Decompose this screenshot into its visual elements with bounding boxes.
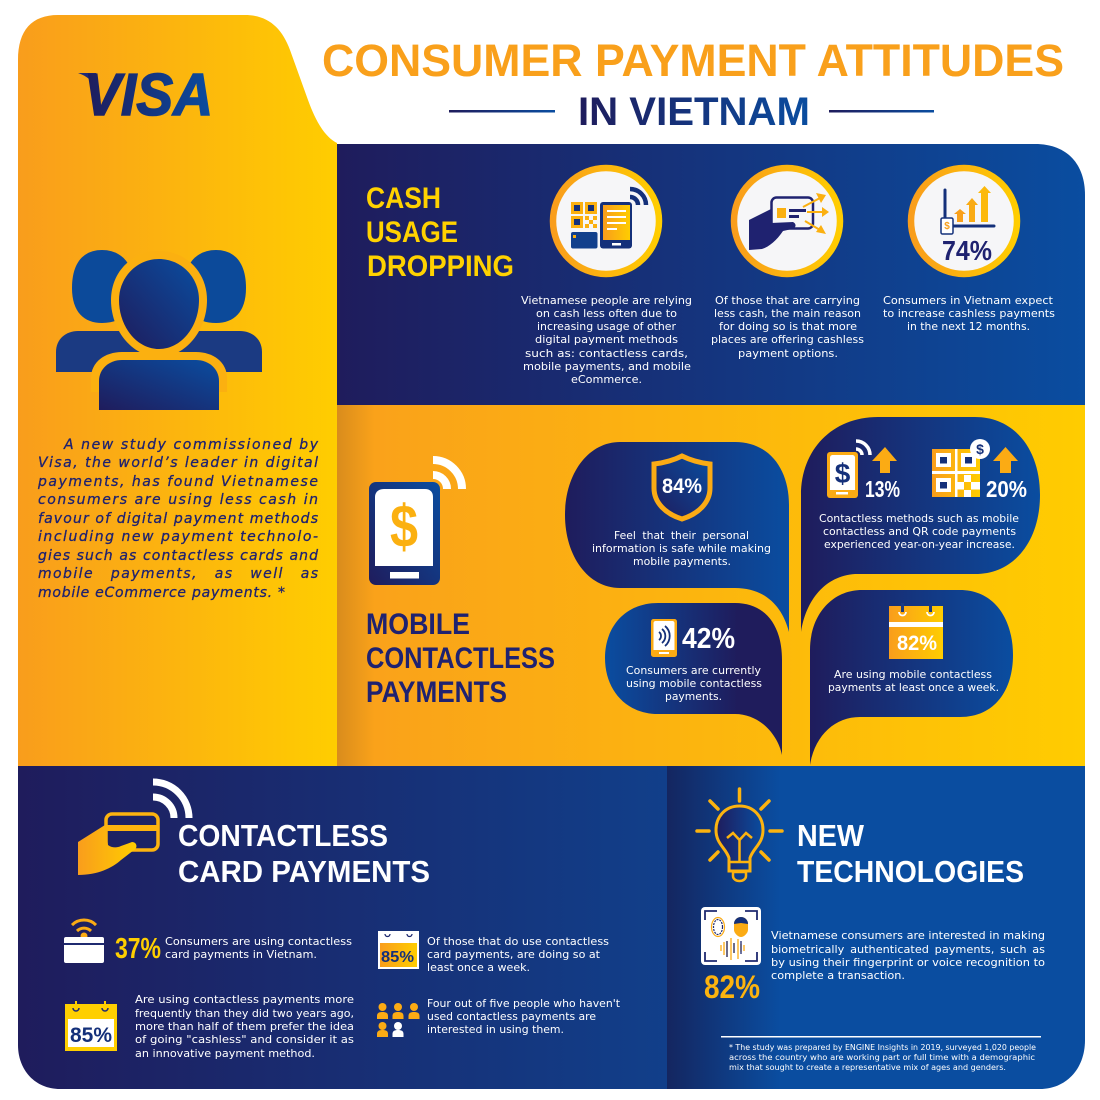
text: intro paragraph: including new payment technolo- [38,529,318,545]
icon: group of people [56,250,262,410]
text: relying on cash less: eCommerce. [571,374,642,386]
stat: 85% weekly: least once a week. [427,962,530,974]
icon: growth chart 74% [911,168,1017,274]
panel: new technologies [667,766,1085,1089]
stat: 85% more frequently: Are using contactless payments more [135,994,354,1006]
footnote: mix that sought to create a representative mix of ages and genders. [729,1063,1006,1072]
stat: 85% weekly: Of those that do use contactless [427,936,609,948]
icon: qr code, card and phone [553,168,659,274]
icon: calendar 82%: 82% [897,632,937,655]
callout: 84% safe: mobile payments. [633,556,731,568]
stat: 85% more frequently: an innovative payment method. [135,1048,315,1060]
panel: intro [18,15,337,766]
logo: VISA: VISA [84,62,213,128]
callout: 84% safe: Feel that their personal [614,530,749,542]
text: intro paragraph: payments, has found Vietnamese [37,474,318,490]
icon: qr code up [932,439,1018,497]
icon: hand with card [734,168,840,274]
text: carrying less cash: less cash, the main reason [714,308,861,320]
title [322,35,1064,134]
icon: phone nfc [651,619,677,657]
stat: 37% card users: card payments in Vietnam. [165,949,317,961]
heading: contactless card payments: CONTACTLESS [178,818,388,853]
stat: 13%: 13% [865,476,900,502]
stat: 82%: 82% [704,969,760,1005]
heading: mobile contactless payments [366,608,555,709]
footnote: * The study was prepared by ENGINE Insights in 2019, surveyed 1,020 people [729,1043,1036,1052]
callout: 82% weekly: payments at least once a week. [828,682,999,694]
stat: four out of five: used contactless payments are [427,1011,596,1023]
icon: phone with dollar [369,460,462,585]
stat: four out of five: Four out of five people who haven't [427,998,620,1010]
icon: shield [654,456,710,519]
heading: new technologies [797,818,1024,889]
callout: 42%: payments. [665,691,722,703]
panel: mobile contactless payments [337,405,1085,766]
text: intro paragraph: consumers are using less cash in [38,492,318,508]
text: biometric payments: biometrically authenticated payments, such as [771,944,1045,956]
callout: 42% [605,603,782,755]
text: intro paragraph: mobile eCommerce payments. * [38,585,285,601]
text: intro paragraph: gies such as contactless cards and [38,548,318,564]
callout: 13% and 20% [801,417,1040,632]
text: biometric payments: complete a transaction. [771,970,905,982]
text: relying on cash less: such as: contactless cards, [525,348,688,360]
text: intro paragraph [37,437,319,601]
stat: 85% more frequently: 85% [70,1024,112,1047]
stat: 37% card users: Consumers are using contactless [165,936,352,948]
icon: calendar 82% [889,603,943,659]
icon: light bulb [697,789,782,881]
text: relying on cash less: increasing usage of other [537,321,677,333]
icon: phone up: $ [835,458,851,489]
callout: 84% safe [565,442,789,632]
text: expect to increase cashless: Consumers in Vietnam expect [883,295,1053,307]
icon: phone up [827,441,897,498]
stat: 20%: 20% [986,476,1027,502]
heading: cash usage dropping: USAGE [366,216,458,249]
icon: shield: 84% [662,475,702,498]
text: expect to increase cashless [883,295,1055,333]
heading: cash usage dropping: DROPPING [367,250,514,283]
heading: new technologies: NEW [797,818,865,853]
callout: 82% weekly: Are using mobile contactless [834,669,992,681]
text: carrying less cash: places are offering cashless [711,334,864,346]
stat: four out of five [377,998,620,1037]
text: carrying less cash [711,295,864,360]
callout: 13% and 20%: Contactless methods such as mobile [819,513,1019,525]
heading: mobile contactless payments: CONTACTLESS [366,642,555,675]
text: relying on cash less [521,295,692,386]
text: biometric payments [771,930,1045,982]
heading: mobile contactless payments: MOBILE [366,608,470,641]
text: expect to increase cashless: in the next 12 months. [907,321,1030,333]
panel: contactless card payments [18,766,667,1089]
text: biometric payments: Vietnamese consumers are interested in making [771,930,1045,942]
footnote: across the country who are working part or full time with a demographic [729,1053,1035,1062]
heading: mobile contactless payments: PAYMENTS [366,676,507,709]
stat: 85% more frequently: more than half of them prefer the idea [135,1021,354,1033]
icon: qr code up: $ [976,441,984,457]
stat: 37% card users [64,920,352,965]
text: intro paragraph: A new study commissioned by [63,437,319,453]
callout: 82% weekly [810,590,1013,765]
callout: 42%: using mobile contactless [626,678,762,690]
text: expect to increase cashless: to increase cashless payments [883,308,1055,320]
stat: 85% weekly: 85% [381,949,414,966]
title: IN VIETNAM [578,90,810,134]
heading: contactless card payments: CARD PAYMENTS [178,854,430,889]
callout: 84% safe: information is safe while making [592,543,771,555]
stat: 85% weekly: card payments, are doing so at [427,949,600,961]
heading: cash usage dropping [366,182,514,283]
stat: 37% card users: 37% [115,933,161,965]
footnote [721,1036,1041,1072]
text: relying on cash less: mobile payments, and mobile [523,361,691,373]
text: biometric payments: by using their fingerprint or voice recognition to [771,957,1045,969]
heading: cash usage dropping: CASH [366,182,441,215]
text: carrying less cash: Of those that are carrying [715,295,860,307]
panel: cash usage dropping [337,144,1085,405]
icon: phone with dollar: $ [390,493,418,560]
icon: growth chart 74%: $ [944,221,950,232]
text: carrying less cash: payment options. [738,348,838,360]
stat: 85% more frequently [65,994,354,1060]
text: intro paragraph: Visa, the world’s leader in digital [38,455,318,471]
stat: 85% more frequently: of going "cashless" and consider it as [135,1034,354,1046]
text: carrying less cash: for doing so is that more [719,321,857,333]
stat: 85% weekly [378,931,609,974]
stat: 42%: 42% [682,623,735,655]
title: CONSUMER PAYMENT ATTITUDES [322,35,1064,86]
stat: four out of five: interested in using them. [427,1024,564,1036]
text: relying on cash less: Vietnamese people are relying [521,295,692,307]
callout: 42%: Consumers are currently [626,665,761,677]
icon: biometric scan [701,907,761,965]
stat: 85% more frequently: frequently than they did two years ago, [135,1008,354,1020]
icon: growth chart 74%: 74% [942,235,992,266]
heading: contactless card payments [178,818,430,889]
text: relying on cash less: on cash less often due to [536,308,677,320]
callout: 13% and 20%: experienced year-on-year increase. [824,539,1015,551]
text: intro paragraph: mobile payments, as well as [38,566,318,582]
text: intro paragraph: favour of digital payment methods [38,511,318,527]
heading: new technologies: TECHNOLOGIES [797,854,1024,889]
icon: hand with contactless card [78,782,189,875]
callout: 13% and 20%: contactless and QR code payments [823,526,1016,538]
text: relying on cash less: digital payment methods [535,334,678,346]
